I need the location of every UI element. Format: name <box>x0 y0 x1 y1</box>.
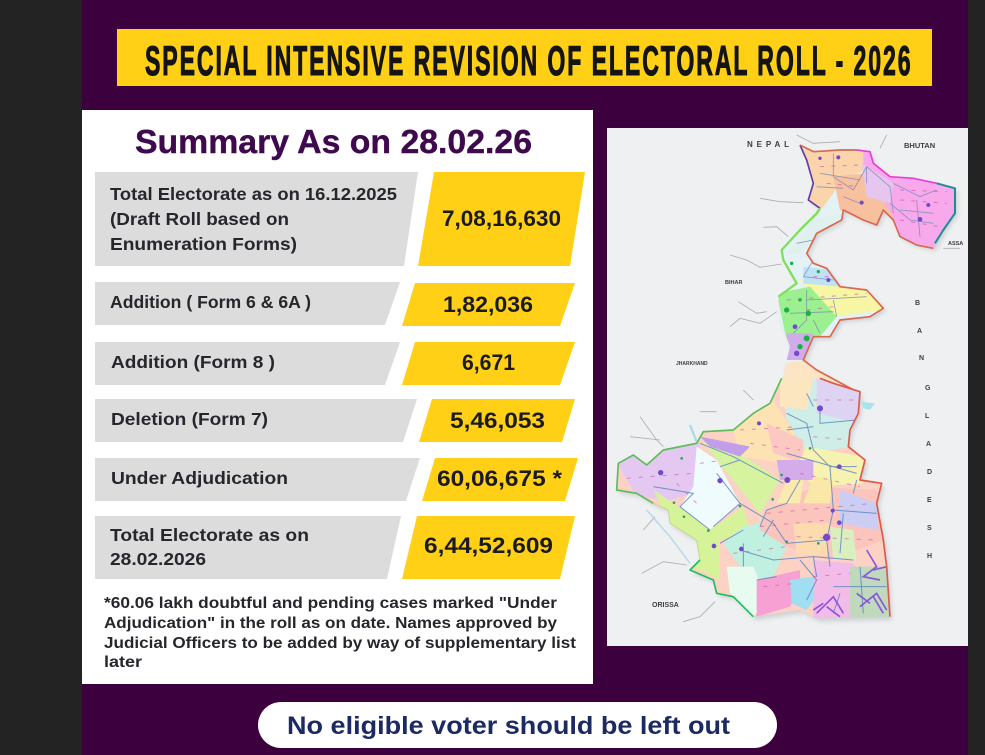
map: neighbouring region labels: NEPAL <box>747 140 789 149</box>
summary heading: Summary As on 28.02.26 <box>135 123 532 160</box>
map: neighbouring region labels: A <box>917 328 922 335</box>
map: neighbouring region labels: G <box>925 385 931 392</box>
row: total electorate draft: (Draft Roll based on <box>110 209 289 229</box>
row: under adjudication: 60,06,675 * <box>437 466 562 491</box>
row: addition form 6: Addition ( Form 6 & 6A ) <box>110 292 311 312</box>
row: total electorate draft <box>95 172 585 266</box>
row: addition form 8: Addition (Form 8 ) <box>111 352 275 372</box>
map: neighbouring region labels: BHUTAN <box>904 141 935 150</box>
slogan pill <box>258 702 777 748</box>
row: total electorate final: 28.02.2026 <box>110 549 206 569</box>
row: addition form 8 <box>95 342 575 385</box>
map: neighbouring region labels: S <box>927 525 932 532</box>
map: neighbouring region labels: BIHAR <box>725 280 742 286</box>
map: neighbouring region labels <box>652 140 963 609</box>
map: rivers outside the state <box>730 135 960 327</box>
row: total electorate final: Total Electorate as on <box>110 525 309 545</box>
row: addition form 6 <box>95 282 575 326</box>
row: under adjudication <box>95 458 578 501</box>
row: total electorate draft: Enumeration Forms) <box>110 234 297 254</box>
footnote: Judicial Officers to be added by way of supplementary list <box>104 635 576 652</box>
slogan text: No eligible voter should be left out <box>287 712 731 740</box>
row: under adjudication: Under Adjudication <box>111 468 288 488</box>
row: total electorate final: 6,44,52,609 <box>424 533 553 558</box>
row: addition form 6: 1,82,036 <box>443 292 533 317</box>
row: deletion form 7 <box>95 399 575 442</box>
map: neighbouring region labels: H <box>927 553 932 560</box>
footnote: later <box>104 654 142 671</box>
title banner <box>117 29 932 86</box>
map: neighbouring region labels: N <box>919 355 924 362</box>
map: northern districts <box>773 140 960 394</box>
footnote: *60.06 lakh doubtful and pending cases marked "Under <box>104 595 557 612</box>
map: neighbouring region labels: JHARKHAND <box>676 361 708 367</box>
map: neighbouring region labels: D <box>927 469 932 476</box>
panel: summary <box>82 110 593 684</box>
title text: SPECIAL INTENSIVE REVISION OF ELECTORAL ROLL - 2026 <box>145 38 911 85</box>
row: total electorate final <box>95 516 575 579</box>
map: neighbouring region labels: B <box>915 300 920 307</box>
map: neighbouring region labels: ORISSA <box>652 602 679 609</box>
panel: map of West Bengal <box>607 128 968 646</box>
map: neighbouring region labels: A <box>926 441 931 448</box>
map: neighbouring region labels: ASSA <box>948 241 963 247</box>
map: neighbouring region labels: L <box>925 413 930 420</box>
row: addition form 8: 6,671 <box>462 350 515 375</box>
row: total electorate draft: Total Electorate as on 16.12.2025 <box>110 184 397 204</box>
map: neighbouring region labels: E <box>927 497 932 504</box>
row: deletion form 7: 5,46,053 <box>450 408 545 433</box>
footnote: Adjudication" in the roll as on date. Names approved by <box>104 615 557 632</box>
row: total electorate draft: 7,08,16,630 <box>442 206 561 231</box>
map: southern districts <box>613 377 893 623</box>
map: lake east of the border <box>862 402 875 410</box>
row: deletion form 7: Deletion (Form 7) <box>111 409 268 429</box>
